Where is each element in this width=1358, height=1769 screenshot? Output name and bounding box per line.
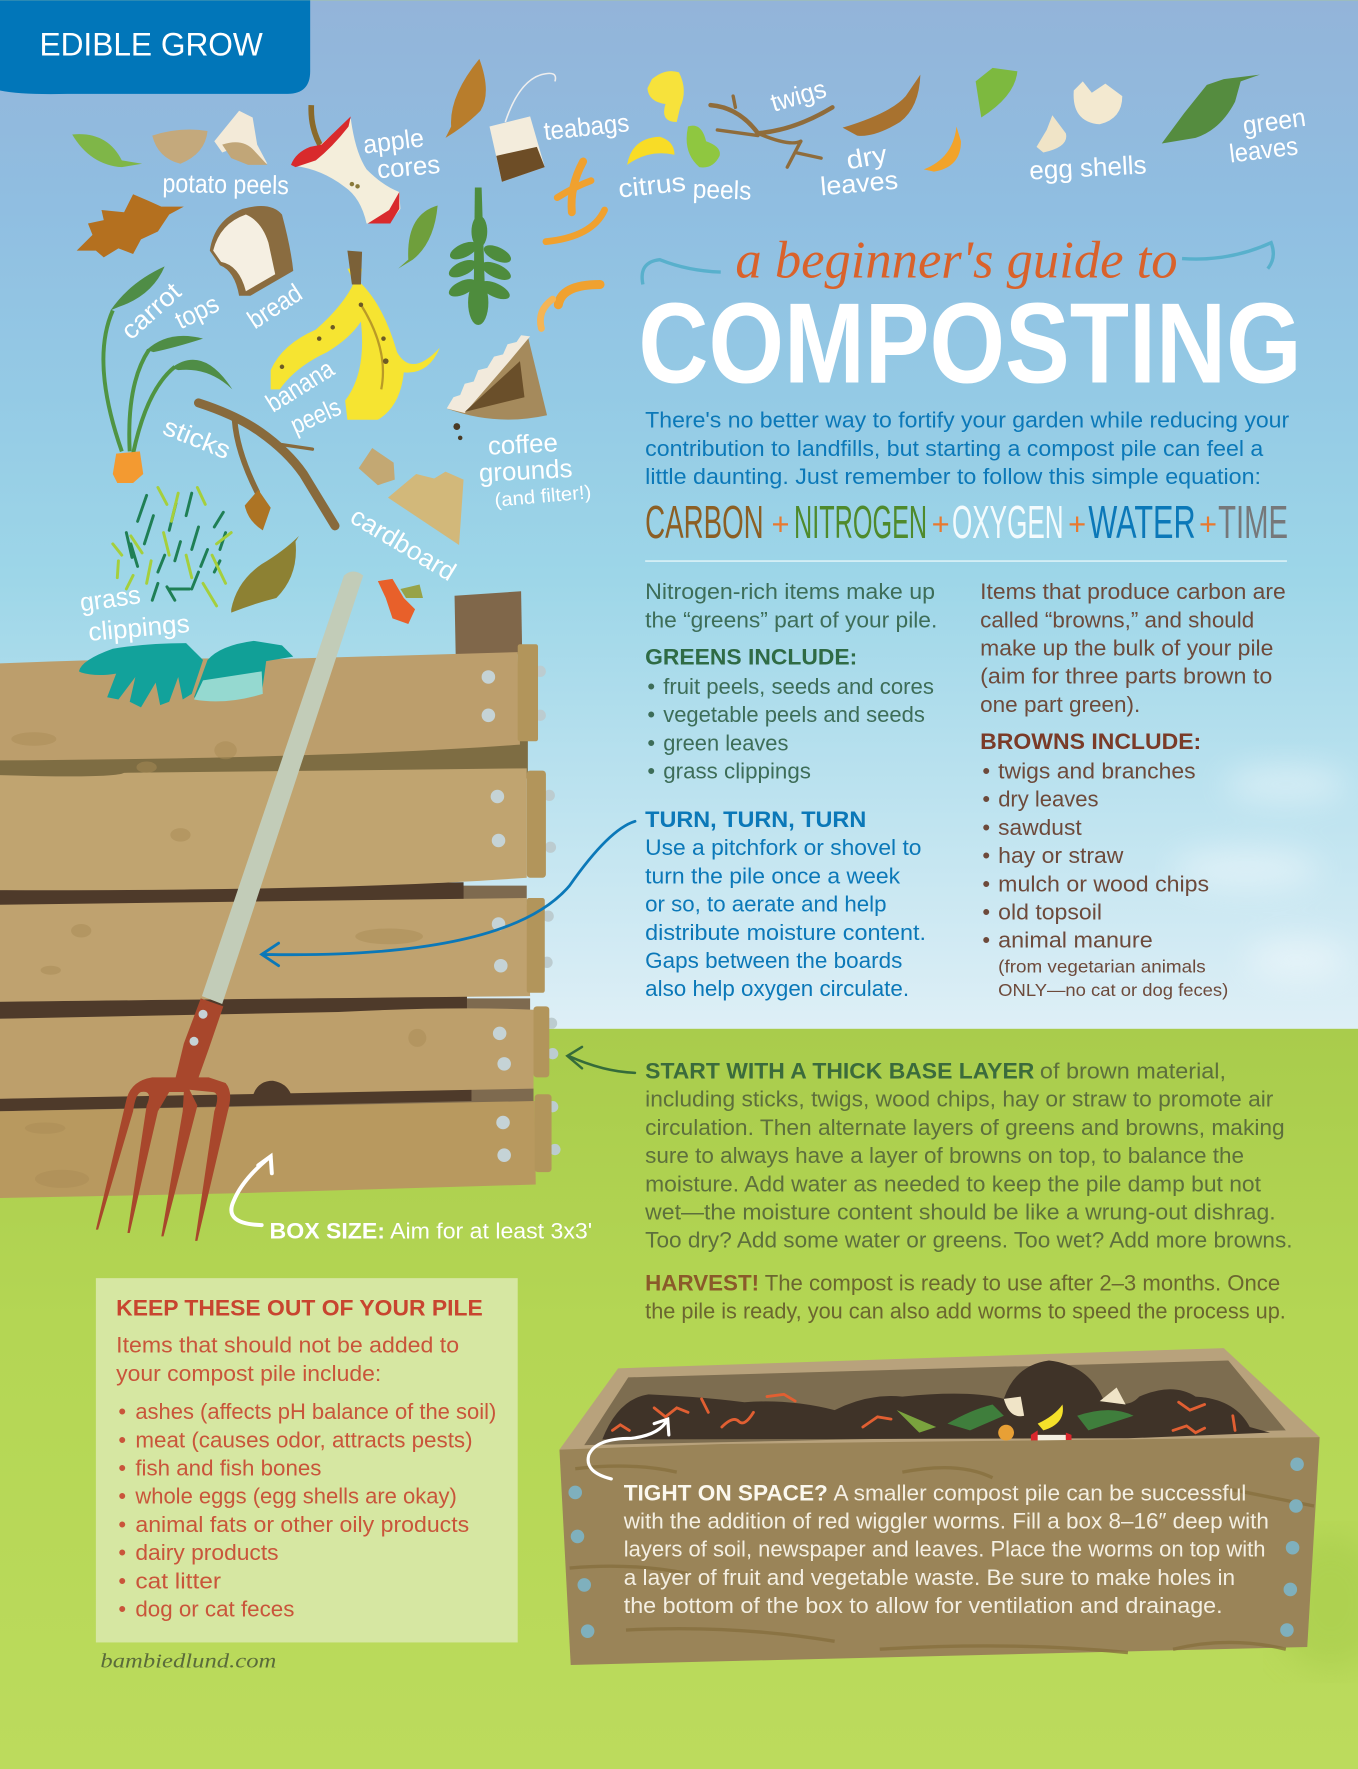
list: browns: • [982,758,990,783]
heading: turn turn turn: TURN, TURN, TURN [645,807,866,832]
icon: potato peels [152,111,267,165]
equation: + [1199,506,1217,542]
icon: cardboard [359,448,464,545]
text: base layer: of brown material, [1040,1059,1226,1084]
text: turn instructions: Use a pitchfork or shovel to [645,835,922,860]
icon: twigs [711,96,832,167]
label: carrot tops [116,277,224,345]
box interior [584,1360,1286,1445]
arrow: base layer to bin [567,1047,635,1073]
label: apple cores: cores [376,151,441,184]
icon: dry leaf [446,59,486,138]
soil [602,1360,1270,1439]
label: box size: BOX SIZE: Aim for at least 3x3' [270,1219,592,1244]
text: base layer: including sticks, twigs, wood chips, hay or straw to promote air [645,1087,1273,1112]
label: grass clippings [78,581,191,647]
list: items to avoid: cat litter [135,1568,221,1593]
icon: lime peel [687,126,720,167]
list: greens: vegetable peels and seeds [663,702,925,727]
board end caps [518,644,552,1172]
column: browns: (aim for three parts brown to [980,664,1272,689]
worms [612,1394,1235,1433]
intro paragraph: contribution to landfills, but starting a compost pile can feel a [645,436,1264,461]
arrow: white curved up to bin [231,1156,272,1225]
illustration: compost ingredients with handwritten labels [72,59,1307,647]
label: carrot tops: carrot [116,277,187,345]
decorative swashes [642,243,1273,284]
label: box size [231,1156,592,1244]
panel intro: Items that should not be added to [116,1333,459,1358]
text: turn instructions: distribute moisture content. [645,920,926,945]
column: browns: called “browns,” and should [980,607,1254,632]
text: base layer: moisture. Add water as needed to keep the pile damp but not [645,1171,1261,1196]
list: items to avoid: dog or cat feces [135,1597,294,1622]
list: browns: dry leaves [998,787,1099,812]
list: greens: • [647,674,655,699]
heading: greens include: GREENS INCLUDE: [645,645,857,670]
equation: CARBON [645,496,764,548]
sky background [0,0,1358,1029]
box front face [559,1437,1320,1665]
title script line: a beginner's guide to [735,232,1178,290]
list: items to avoid: animal fats or other oily products [135,1512,469,1537]
list: browns: sawdust [998,815,1082,840]
icon: lemon peels [627,71,684,165]
label: apple cores: apple [362,124,425,160]
credit: bambiedlund.com [100,1650,276,1672]
board 3 [0,898,530,1002]
label: grass clippings: grass [78,581,142,617]
list: items to avoid: fish and fish bones [135,1456,321,1481]
list: browns: mulch or wood chips [998,871,1209,896]
list: browns: • [982,928,990,953]
column: greens: the “greens” part of your pile. [645,607,937,632]
list: browns: twigs and branches [998,758,1196,783]
pitchfork [96,572,363,1241]
column: turn the pile [645,807,926,1001]
text: turn instructions: turn the pile once a week [645,863,901,888]
panel intro [116,1333,459,1386]
fork socket [175,998,223,1081]
label: banana peels: peels [287,393,345,440]
bolts on planks [482,670,511,1162]
text: base layer [644,1058,1293,1253]
label: grass clippings: clippings [87,610,191,647]
icon: olive leaf [231,536,299,613]
label: dry leaves [819,141,899,201]
label: coffee grounds (and filter!): grounds [478,455,573,488]
column: greens: Nitrogen-rich items make up [645,579,935,604]
bolts behind planks [535,666,561,1155]
list: greens [647,674,934,783]
intro paragraph: There's no better way to fortify your garden while reducing your [645,408,1289,433]
text: base layer: Too dry? Add some water or greens. Too wet? Add more browns. [645,1228,1293,1253]
wood grain [570,1466,1314,1653]
screws [568,1457,1304,1638]
panel heading: KEEP THESE OUT OF YOUR PILE [116,1295,483,1320]
icon: green leaf [72,134,142,167]
label: apple cores [362,124,441,184]
label: cardboard: cardboard [345,502,460,587]
post [455,591,522,654]
label: teabags: teabags [542,109,631,146]
label: bread: bread [243,279,307,335]
equation: NITROGEN [794,496,927,548]
box back rim [559,1348,1320,1450]
compost bin illustration [0,591,561,1198]
list: browns: • [982,787,990,812]
icon: big green leaf [1162,75,1260,143]
equation: + [771,506,790,542]
label: coffee grounds (and filter!): coffee [487,429,559,461]
grass shadow [1275,1534,1358,1670]
list: items to avoid: • [118,1427,126,1452]
board 4 [0,1008,534,1099]
text: base layer: START WITH A THICK BASE LAYER [645,1059,1034,1084]
list: items to avoid [118,1399,496,1622]
text: turn instructions: Gaps between the boards [645,948,902,973]
label: banana peels [261,355,345,440]
list: greens: • [647,758,655,783]
text: tight on space: A smaller compost pile can be successful [834,1480,1246,1505]
list: browns: hay or straw [998,843,1124,868]
icon: oak leaf [77,194,184,257]
label: green leaves: green [1241,104,1307,140]
label: citrus peels: peels [692,176,752,206]
list: items to avoid: • [118,1568,126,1593]
worm box illustration [559,1348,1358,1670]
text: turn instructions: or so, to aerate and help [645,892,887,917]
list: greens: fruit peels, seeds and cores [663,674,934,699]
panel: keep these out of your pile [96,1278,518,1642]
label: green leaves [1228,104,1307,169]
arrow: turn to fork [262,821,635,966]
column: browns: make up the bulk of your pile [980,636,1273,661]
icon: sticks and leaf [199,403,335,530]
icon: bread [210,206,293,296]
text: harvest [645,1271,1286,1324]
text: harvest: the pile is ready, you can also add worms to speed the process up. [645,1299,1286,1324]
equation: TIME [1218,496,1288,548]
text: tight on space: the bottom of the box to allow for ventilation and drainage. [624,1593,1223,1618]
list: items to avoid: • [118,1456,126,1481]
list: browns: • [982,871,990,896]
board 2 [0,768,527,890]
text: base layer: sure to always have a layer of browns on top, to balance the [645,1143,1244,1168]
gardening gloves [79,641,293,707]
intro paragraph [645,408,1289,489]
icon: carrot with tops [103,266,232,483]
list: browns [982,758,1228,1000]
grass background [0,1029,1358,1769]
label: coffee grounds (and filter!) [478,429,592,512]
equation: WATER [1088,496,1196,548]
label: twigs: twigs [768,75,830,118]
list: greens: grass clippings [663,758,811,783]
icon: orange slice [924,127,961,172]
list: browns: (from vegetarian animals [998,956,1206,976]
label: carrot tops: tops [171,290,224,335]
label: sticks: sticks [159,413,234,465]
icon: coffee filter [447,335,547,440]
icon: arugula leaf [446,187,514,325]
list: greens: • [647,702,655,727]
label: green leaves: leaves [1228,132,1300,169]
icon: brown leaf [843,75,920,136]
text: harvest: HARVEST! [645,1271,759,1296]
list: browns: animal manure [998,928,1153,953]
label: coffee grounds (and filter!): (and filter!) [494,482,592,512]
list: greens: • [647,730,655,755]
title block [638,232,1302,408]
equation: + [1068,506,1086,542]
icon: apple core [291,105,400,224]
label: dry leaves: dry [844,141,889,175]
list: items to avoid: dairy products [135,1540,279,1565]
column: browns: Items that produce carbon are [980,579,1286,604]
board 5 [0,1101,536,1198]
clouds [1173,766,1348,979]
list: items to avoid: whole eggs (egg shells are okay) [134,1484,457,1509]
equation: OXYGEN [952,496,1064,548]
text: tight on space: a layer of fruit and vegetable waste. Be sure to make holes in [624,1565,1235,1590]
list: items to avoid: meat (causes odor, attracts pests) [135,1427,473,1452]
column: browns [980,579,1286,1000]
text: base layer: circulation. Then alternate layers of greens and browns, making [645,1115,1285,1140]
panel intro: your compost pile include: [116,1361,381,1386]
label: dry leaves: leaves [819,167,899,201]
banner: publication tag: EDIBLE GROW [39,25,263,62]
icon: grass clippings [113,487,231,606]
list: items to avoid: • [118,1484,126,1509]
gaps between boards [0,739,534,1113]
column: greens [645,579,937,783]
list: browns: • [982,815,990,840]
list: items to avoid: ashes (affects pH balance of the soil) [135,1399,496,1424]
icon: lime leaf [976,68,1017,118]
label: banana peels: banana [261,355,340,418]
icon: green leaf 2 [398,206,438,269]
label: potato peels: potato peels [162,170,289,200]
label: egg shells: egg shells [1029,151,1147,186]
label: citrus peels: citrus [617,169,687,204]
equation: + [932,506,950,542]
list: items to avoid: • [118,1512,126,1537]
list: browns: old topsoil [998,899,1102,924]
banner: publication tag [0,0,310,94]
soil bump on board 4 [253,1081,291,1097]
text: tight on space: with the addition of red wiggler worms. Fill a box 8–16″ deep with [623,1509,1269,1534]
intro paragraph: little daunting. Just remember to follow this simple equation: [645,464,1261,489]
label: citrus peels [617,169,752,206]
arrow: tight on space to worms [588,1419,669,1479]
board 1 [0,652,520,760]
list: greens: green leaves [663,730,788,755]
text: tight on space: TIGHT ON SPACE? [624,1480,828,1505]
text: turn instructions: also help oxygen circulate. [645,976,909,1001]
wood stains [11,732,426,1188]
text: harvest: The compost is ready to use after 2–3 months. Once [765,1271,1280,1296]
column: browns: one part green). [980,692,1140,717]
text: base layer: wet—the moisture content should be like a wrung-out dishrag. [644,1199,1276,1224]
icon: egg shells [1037,81,1122,152]
icon: orange scraps [378,579,423,624]
fork tines [96,1077,230,1241]
text: turn instructions [645,835,926,1001]
icon: banana peel [271,251,440,420]
icon: teabag [490,73,555,182]
text: tight on space [623,1480,1269,1618]
list: browns: • [982,843,990,868]
icon: orange peels [540,162,605,328]
fork handle [202,572,363,1004]
heading: browns include: BROWNS INCLUDE: [980,729,1201,754]
food scraps on soil [897,1388,1134,1446]
list: items to avoid: • [118,1597,126,1622]
text: tight on space: layers of soil, newspaper and leaves. Place the worms on top with [624,1537,1266,1562]
equation [645,496,1288,548]
list: browns: ONLY—no cat or dog feces) [998,980,1228,1000]
list: items to avoid: • [118,1540,126,1565]
list: items to avoid: • [118,1399,126,1424]
list: browns: • [982,899,990,924]
